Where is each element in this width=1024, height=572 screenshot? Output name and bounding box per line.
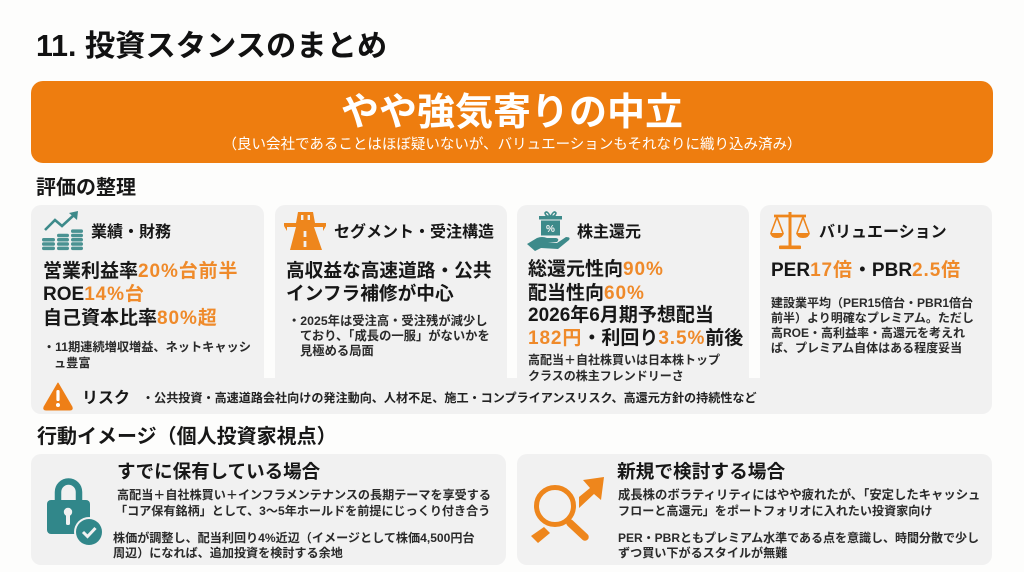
icon: magnifier with arrow bbox=[531, 477, 604, 543]
note: 前半）より明確なプレミアム。ただし bbox=[771, 311, 974, 325]
key metrics: PER17倍・PBR2.5倍 bbox=[771, 260, 961, 281]
bullet note: ・11期連続増収増益、ネットキャッシ bbox=[43, 340, 251, 354]
icon: gift on hand bbox=[527, 211, 570, 251]
risk label: リスク bbox=[82, 390, 130, 407]
panel: risk band bbox=[31, 378, 992, 414]
panel: already holding bbox=[31, 454, 506, 565]
banner: overall stance bbox=[31, 81, 993, 163]
panel: segments and orders bbox=[275, 205, 507, 378]
key metrics bbox=[43, 260, 238, 329]
panel heading: 新規で検討する場合 bbox=[617, 461, 785, 482]
key metrics: 182円・利回り3.5%前後 bbox=[528, 328, 743, 349]
paragraph: core holding: 高配当＋自社株買い＋インフラメンテナンスの長期テーマを享受する bbox=[117, 488, 491, 502]
title: 11. 投資スタンスのまとめ bbox=[36, 30, 387, 63]
paragraph: target investor bbox=[618, 488, 980, 518]
card heading: 株主還元 bbox=[577, 224, 641, 241]
panel: shareholder returns bbox=[517, 205, 749, 378]
panel: considering new purchase bbox=[517, 454, 992, 565]
paragraph: target investor: フローと高還元」をポートフォリオに入れたい投資家向け bbox=[618, 504, 932, 518]
bullet note: 見極める局面 bbox=[300, 344, 374, 358]
panel: earnings and financials bbox=[31, 205, 264, 378]
key message: 高収益な高速道路・公共 bbox=[286, 260, 492, 281]
icon: warning triangle bbox=[43, 382, 73, 410]
note bbox=[771, 296, 974, 355]
icon: padlock with check bbox=[47, 478, 102, 545]
risk text: ・公共投資・高速道路会社向けの発注動向、人材不足、施工・コンプライアンスリスク、高還元方針の持続性など bbox=[142, 391, 757, 405]
banner subtext: （良い会社であることはほぼ疑いないが、バリュエーションもそれなりに織り込み済み） bbox=[222, 137, 801, 153]
key message: インフラ補修が中心 bbox=[286, 283, 454, 304]
icon: highway bbox=[284, 212, 326, 250]
bullet note: ・2025年は受注高・受注残が減少し bbox=[288, 314, 488, 328]
note: 建設業平均（PER15倍台・PBR1倍台 bbox=[771, 296, 973, 310]
key message bbox=[286, 260, 492, 304]
key metrics: 営業利益率20%台前半 bbox=[43, 261, 238, 282]
paragraph: core holding: 「コア保有銘柄」として、3～5年ホールドを前提にじっくり付き合う bbox=[115, 504, 490, 518]
card heading: セグメント・受注構造 bbox=[334, 224, 494, 241]
icon: gift on hand: % bbox=[546, 224, 555, 235]
panel: valuation bbox=[760, 205, 992, 378]
paragraph: core holding bbox=[115, 488, 491, 518]
note: ば、プレミアム自体はある程度妥当 bbox=[771, 341, 962, 355]
paragraph: target investor: 成長株のボラティリティにはやや疲れたが、「安定したキャッシュ bbox=[618, 488, 980, 502]
paragraph: add-on condition: 周辺）になれば、追加投資を検討する余地 bbox=[113, 546, 343, 560]
paragraph: add-on condition: 株価が調整し、配当利回り4%近辺（イメージとして株価4,500円台 bbox=[113, 531, 475, 545]
key metrics: ROE14%台 bbox=[43, 284, 145, 305]
key metrics bbox=[528, 258, 743, 349]
note bbox=[528, 353, 720, 383]
bullet note bbox=[43, 340, 251, 370]
key metrics: 配当性向60% bbox=[528, 283, 645, 304]
note: 高配当＋自社株買いは日本株トップ bbox=[528, 353, 720, 367]
banner headline: やや強気寄りの中立 bbox=[341, 92, 683, 134]
card heading: バリュエーション bbox=[819, 224, 947, 241]
key metrics: 総還元性向90% bbox=[528, 259, 664, 280]
paragraph: add-on condition bbox=[113, 531, 475, 560]
panel heading: すでに保有している場合 bbox=[117, 461, 320, 482]
paragraph: buying style: ずつ買い下がるスタイルが無難 bbox=[618, 546, 787, 560]
card heading: 業績・財務 bbox=[91, 224, 171, 241]
section heading: evaluation: 評価の整理 bbox=[36, 177, 136, 199]
bullet note bbox=[288, 314, 490, 358]
note: 高ROE・高利益率・高還元を考えれ bbox=[771, 326, 965, 340]
note: クラスの株主フレンドリーさ bbox=[528, 369, 684, 383]
paragraph: buying style bbox=[618, 531, 979, 560]
icon: chart with coins bbox=[42, 211, 83, 250]
section heading: action image: 行動イメージ（個人投資家視点） bbox=[37, 426, 337, 448]
paragraph: buying style: PER・PBRともプレミアム水準である点を意識し、時間分散で少し bbox=[618, 531, 979, 545]
bullet note: ュ豊富 bbox=[54, 356, 91, 370]
icon: balance scale bbox=[770, 212, 810, 250]
key metrics: 2026年6月期予想配当 bbox=[528, 305, 714, 326]
bullet note: ており、「成長の一服」がないかを bbox=[300, 329, 490, 343]
key metrics: 自己資本比率80%超 bbox=[43, 308, 218, 329]
